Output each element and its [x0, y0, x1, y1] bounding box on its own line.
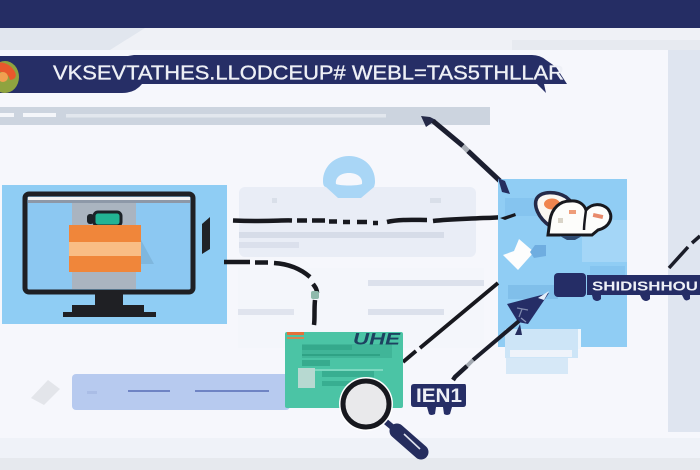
node square: [554, 273, 586, 297]
icon: computer monitor: [25, 194, 193, 317]
arrow: diagonal to node: [453, 291, 549, 380]
panel: lower text lines: [238, 268, 484, 348]
arrow: dashed horizontal connector: [233, 215, 514, 223]
logo icon: [0, 61, 19, 93]
card label: UHE: [353, 330, 401, 348]
connector bead: [311, 291, 319, 299]
panel: green card: [285, 330, 403, 408]
label: right tag: SHIDISHHOU: [592, 278, 698, 294]
label: small tag: [411, 384, 466, 415]
arrow: dashed curved connector: [224, 262, 317, 325]
panel: upper text card: [239, 187, 476, 257]
icon: grey tilted tag: [31, 380, 60, 405]
panel: monitor: [2, 185, 227, 324]
grey toolbar bar: [0, 107, 490, 125]
icon: blue badge: [323, 156, 375, 198]
label: small tag: IEN1: [416, 386, 462, 407]
title text: VKSEVTATHES.LLODCEUP# WEBL=TAS5THLLAR: [53, 62, 564, 84]
arrow: card to right panel: [403, 283, 498, 362]
icon: white diamond: [503, 239, 534, 270]
panel: long blue bar: [72, 374, 290, 410]
icon: magnifying glass: [339, 377, 421, 452]
arrow: toolbar to right panel: [421, 116, 500, 181]
panel: right blue column: [498, 179, 627, 374]
arrow head at right panel: [498, 178, 510, 194]
label: right tag: [587, 275, 700, 301]
arrow: far right dashes: [669, 236, 700, 268]
arrow tip: [500, 213, 516, 220]
icon: cloud chat bubbles: [536, 193, 611, 240]
title banner: [0, 55, 567, 93]
panel tab marker: [202, 217, 210, 254]
top navigation band: [0, 0, 700, 28]
